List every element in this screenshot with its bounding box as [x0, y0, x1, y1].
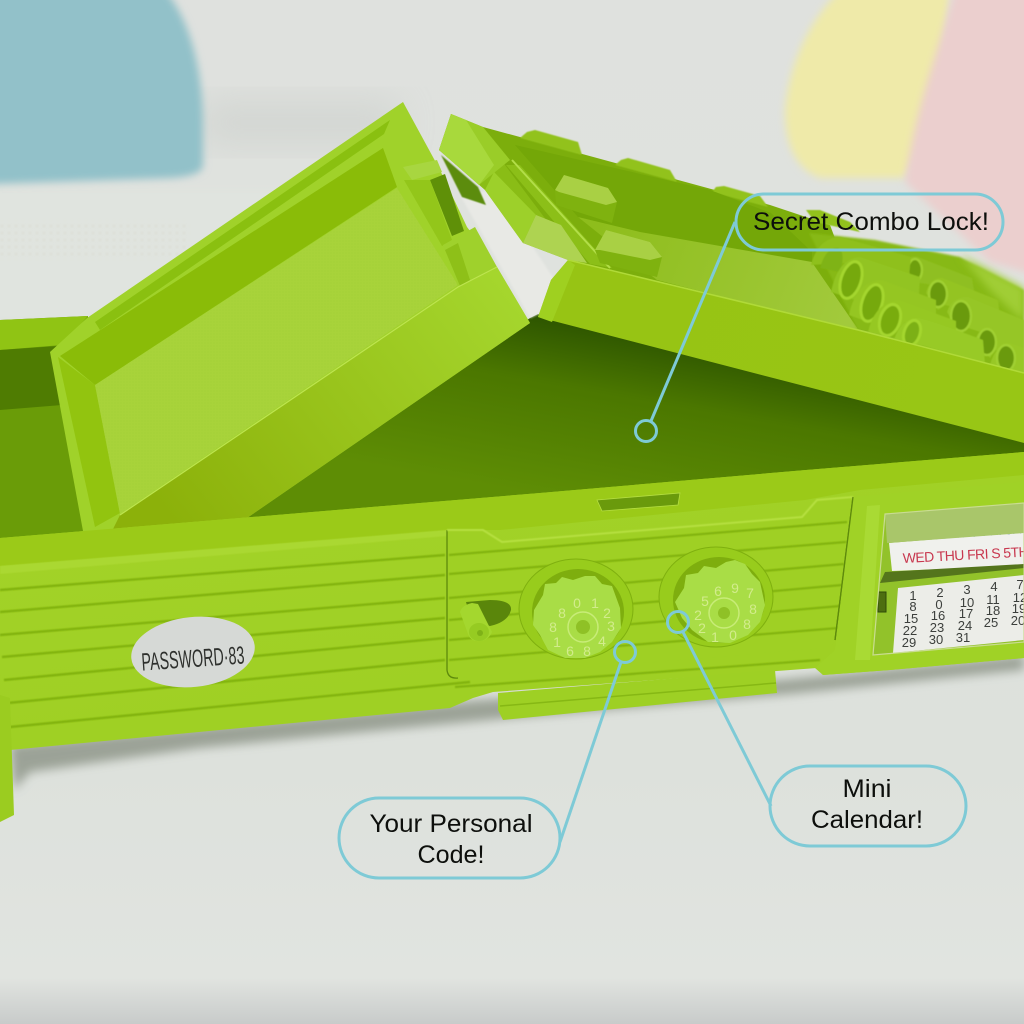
small rivet	[878, 592, 886, 612]
dial digits	[694, 580, 757, 645]
callout: your personal code: Code!	[418, 841, 484, 869]
lid far area	[809, 233, 1024, 375]
right open lid	[439, 114, 1024, 443]
calendar clear window: 3	[963, 582, 971, 597]
dial digits: 8	[549, 619, 557, 635]
dial digits: 2	[698, 620, 706, 636]
callout: mini calendar: Calendar!	[811, 806, 923, 834]
lid hinge blocks	[439, 114, 612, 268]
hinge shadow	[441, 155, 486, 205]
calendar clear window: 2	[936, 585, 944, 600]
roller back row 5	[990, 343, 1024, 376]
dial digits: 1	[711, 629, 719, 645]
calendar clear window: 31	[956, 630, 970, 645]
date card	[893, 575, 1024, 653]
rim groove	[95, 120, 390, 330]
blurred yellow block	[785, 0, 950, 178]
slider switch	[460, 600, 511, 641]
dial digits: 8	[583, 643, 591, 659]
box front wall	[0, 452, 1024, 822]
roller back row 1	[905, 257, 975, 296]
gap behind lid	[460, 190, 568, 318]
left open lid tray	[50, 102, 530, 531]
callout: secret combo lock: Secret Combo Lock!	[753, 208, 989, 236]
roller front row 2	[831, 257, 920, 301]
dial digits: 3	[607, 618, 615, 634]
front wall body	[0, 452, 1024, 750]
dial digits: 8	[749, 601, 757, 617]
calendar clear window: 18	[986, 603, 1000, 618]
password sticker	[128, 611, 258, 693]
calendar housing	[815, 482, 1024, 675]
dial digits: 4	[598, 633, 606, 649]
dial digits: 7	[746, 585, 754, 601]
dial digits: 6	[714, 583, 722, 599]
tray hinge clip	[403, 160, 497, 287]
calendar clear window: 15	[904, 611, 918, 626]
day strip	[889, 532, 1024, 571]
calendar clear window: 17	[959, 606, 973, 621]
calendar clear window: 10	[960, 595, 974, 610]
dial digits: 8	[743, 616, 751, 632]
dial ring	[659, 547, 773, 647]
box interior	[240, 314, 1024, 520]
calendar clear window: 24	[958, 618, 972, 633]
tray inner wall	[60, 148, 397, 385]
roller front row 4	[868, 300, 956, 338]
calendar clear window: 8	[909, 599, 917, 614]
calendar clear window: 22	[903, 623, 917, 638]
dial digits: 9	[731, 580, 739, 596]
callout: your personal code	[339, 642, 636, 878]
calendar clear window: 0	[935, 597, 943, 612]
lock panel ribs	[449, 522, 847, 687]
dial digits	[549, 595, 615, 659]
dial digits: 0	[573, 595, 581, 611]
lock panel	[447, 497, 853, 678]
blurred blue block	[0, 0, 203, 184]
latch slot	[597, 493, 680, 511]
callout: mini calendar	[668, 612, 966, 846]
dial digits: 5	[701, 593, 709, 609]
blurred pink block	[905, 0, 1024, 275]
password sticker: PASSWORD·83	[141, 641, 245, 677]
dial knob	[675, 560, 765, 643]
roller back row 4	[975, 327, 1024, 362]
calendar clear window: TUE WED THU FRI SAT	[895, 522, 1024, 545]
calendar clear window: 1	[909, 588, 917, 603]
callout: your personal code: Your Personal	[370, 810, 532, 838]
lid inner upper wall	[515, 145, 812, 262]
calendar clear window: 23	[930, 620, 944, 635]
lid inner floor	[578, 217, 860, 332]
dial digits: 1	[553, 634, 561, 650]
tray outer rim	[50, 102, 530, 531]
lid inner buttons	[555, 175, 662, 277]
calendar clear window: 30	[929, 632, 943, 647]
tray textured floor	[95, 188, 458, 514]
table shadow under box	[10, 655, 1024, 790]
dial digits: 1	[591, 595, 599, 611]
roller front row 5	[894, 318, 985, 364]
calendar clear window: 29	[902, 635, 916, 650]
left combination dial	[519, 559, 633, 659]
dial digits: 0	[729, 627, 737, 643]
calendar clear window: 11	[986, 592, 1000, 607]
roller front row 3	[849, 280, 936, 324]
callout: secret combo lock	[636, 194, 1003, 442]
bottom latch	[498, 670, 777, 720]
roller front row 1	[811, 237, 911, 276]
dial ring	[519, 559, 633, 659]
dial digits: 6	[566, 643, 574, 659]
top rim	[0, 452, 1024, 566]
roller back row 2	[926, 278, 1000, 318]
lid top wall	[483, 127, 870, 332]
lid top tabs	[520, 130, 860, 232]
callout: mini calendar: Mini	[842, 775, 892, 803]
right combination dial	[659, 547, 773, 647]
roller back row 3	[947, 297, 1024, 346]
lid front wall	[538, 260, 1024, 443]
combination rollers	[811, 237, 1024, 376]
window reflection	[885, 503, 1024, 543]
dial digits: 8	[558, 605, 566, 621]
dial digits: 2	[603, 605, 611, 621]
calendar clear window: 7	[1016, 577, 1024, 592]
dial digits: 2	[694, 607, 702, 623]
dial knob	[533, 576, 621, 658]
left foot	[0, 695, 14, 822]
left rear compartment	[0, 316, 90, 540]
tray side wall	[58, 357, 120, 527]
calendar clear window: 16	[931, 608, 945, 623]
calendar clear window: 25	[984, 615, 998, 630]
tray front wall	[112, 267, 530, 531]
calendar clear window	[873, 503, 1024, 655]
lid hinge base	[439, 114, 657, 280]
calendar clear window: 4	[990, 579, 998, 594]
left panel ribs	[0, 555, 470, 727]
